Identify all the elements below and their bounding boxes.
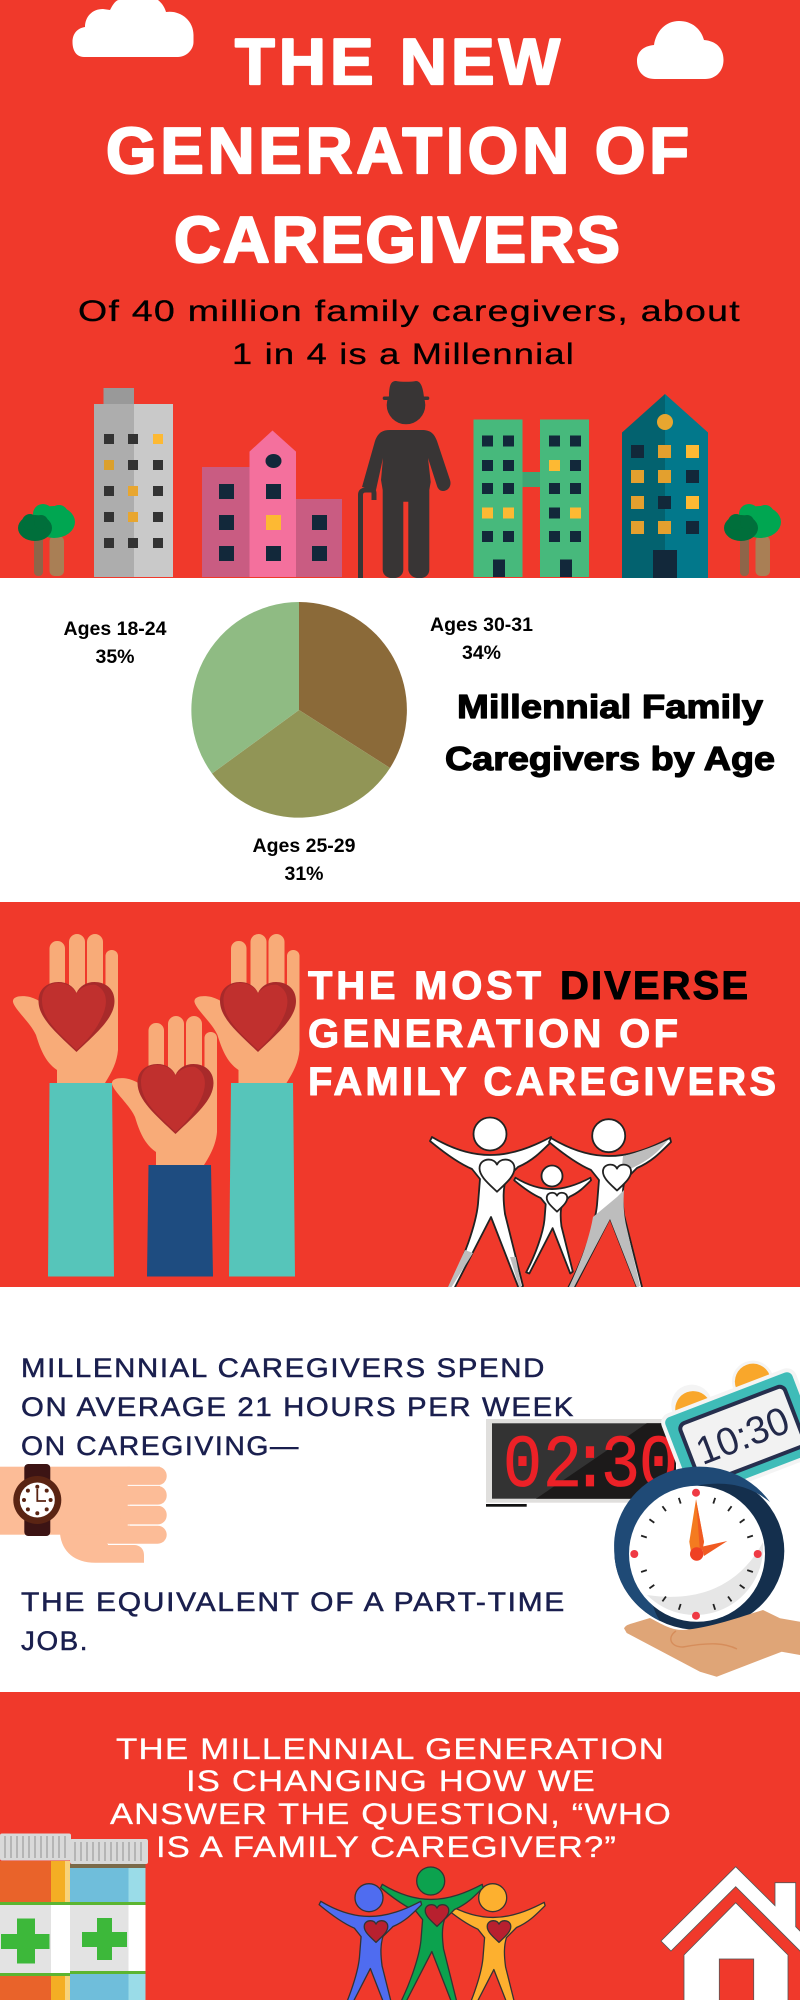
text: hours per week: ON CAREGIVING— — [21, 1431, 300, 1461]
heading: most diverse: THE MOST — [308, 964, 541, 1008]
icon: right cloud — [637, 21, 724, 79]
icon: left trees — [18, 504, 75, 576]
panel: hours per week — [0, 1287, 800, 1692]
label: ages 18-24: 35% — [95, 646, 135, 668]
heading: most diverse: GENERATION OF — [308, 1012, 678, 1056]
icon: orange pill bottle — [0, 1834, 71, 2000]
icon: house — [661, 1867, 800, 2000]
icon: alarm clock: 10:30 — [690, 1399, 795, 1474]
heading: who is a family caregiver — [110, 1733, 672, 1864]
panel: age pie chart — [0, 578, 800, 902]
title: CAREGIVERS — [174, 203, 620, 276]
label: ages 25-29: 31% — [284, 863, 324, 885]
icon: teal building — [622, 394, 708, 578]
subtitle: Of 40 million family caregivers, about — [78, 295, 741, 328]
heading: who is a family caregiver: ANSWER THE QUESTION, “WHO — [110, 1798, 672, 1831]
label: ages 30-31: Ages 30-31 — [430, 614, 533, 636]
icon: digital clock: 02:30 — [503, 1424, 678, 1508]
label: ages 25-29 — [253, 835, 356, 885]
heading: chart title: Caregivers by Age — [445, 740, 775, 777]
heading: most diverse: FAMILY CAREGIVERS — [308, 1060, 776, 1104]
icon: older man with cane — [360, 381, 451, 580]
title: THE NEW — [235, 25, 561, 98]
icon: right raised hand with heart — [194, 934, 300, 1276]
icon: wall clock on open hand — [614, 1467, 800, 1677]
label: ages 30-31: 34% — [462, 642, 501, 664]
text: hours per week — [21, 1353, 575, 1461]
title — [106, 25, 689, 276]
heading: most diverse — [308, 964, 776, 1104]
icon: alarm clock — [653, 1347, 800, 1501]
panel: title header — [0, 0, 800, 580]
title: GENERATION OF — [106, 114, 689, 187]
heading: most diverse: DIVERSE — [560, 964, 748, 1008]
icon: wrist with watch — [0, 1464, 167, 1563]
icon: gray building — [94, 388, 173, 577]
heading: chart title — [445, 688, 775, 777]
icon: blue pill bottle — [70, 1839, 148, 2000]
label: ages 18-24 — [64, 618, 167, 668]
subtitle — [78, 295, 741, 371]
icon: white family figures — [430, 1118, 671, 1290]
text: part-time job — [21, 1587, 566, 1656]
text: part-time job: JOB. — [21, 1626, 89, 1656]
label: ages 30-31 — [430, 614, 533, 664]
heading: who is a family caregiver: IS A FAMILY CAREGIVER?” — [156, 1831, 617, 1864]
pie chart — [191, 602, 407, 818]
text: hours per week: ON AVERAGE 21 HOURS PER WEEK — [21, 1392, 575, 1422]
heading: who is a family caregiver: THE MILLENNIAL GENERATION — [116, 1733, 665, 1766]
heading: chart title: Millennial Family — [457, 688, 764, 725]
label: ages 25-29: Ages 25-29 — [253, 835, 356, 857]
icon: pink building — [202, 430, 342, 577]
heading: who is a family caregiver: IS CHANGING HOW WE — [186, 1765, 596, 1798]
panel: who is a family caregiver — [0, 1692, 800, 2000]
icon: left cloud — [72, 0, 194, 57]
subtitle: 1 in 4 is a Millennial — [232, 338, 575, 371]
panel: most diverse generation — [0, 902, 800, 1290]
icon: colorful family — [319, 1867, 545, 2000]
text: hours per week: MILLENNIAL CAREGIVERS SPEND — [21, 1353, 546, 1383]
icon: left raised hand with heart — [13, 934, 118, 1276]
text: part-time job: THE EQUIVALENT OF A PART-TIME — [21, 1587, 566, 1617]
icon: middle raised hand with heart — [112, 1016, 217, 1276]
icon: right trees — [724, 504, 781, 576]
label: ages 18-24: Ages 18-24 — [64, 618, 167, 640]
icon: green twin building — [474, 420, 589, 577]
